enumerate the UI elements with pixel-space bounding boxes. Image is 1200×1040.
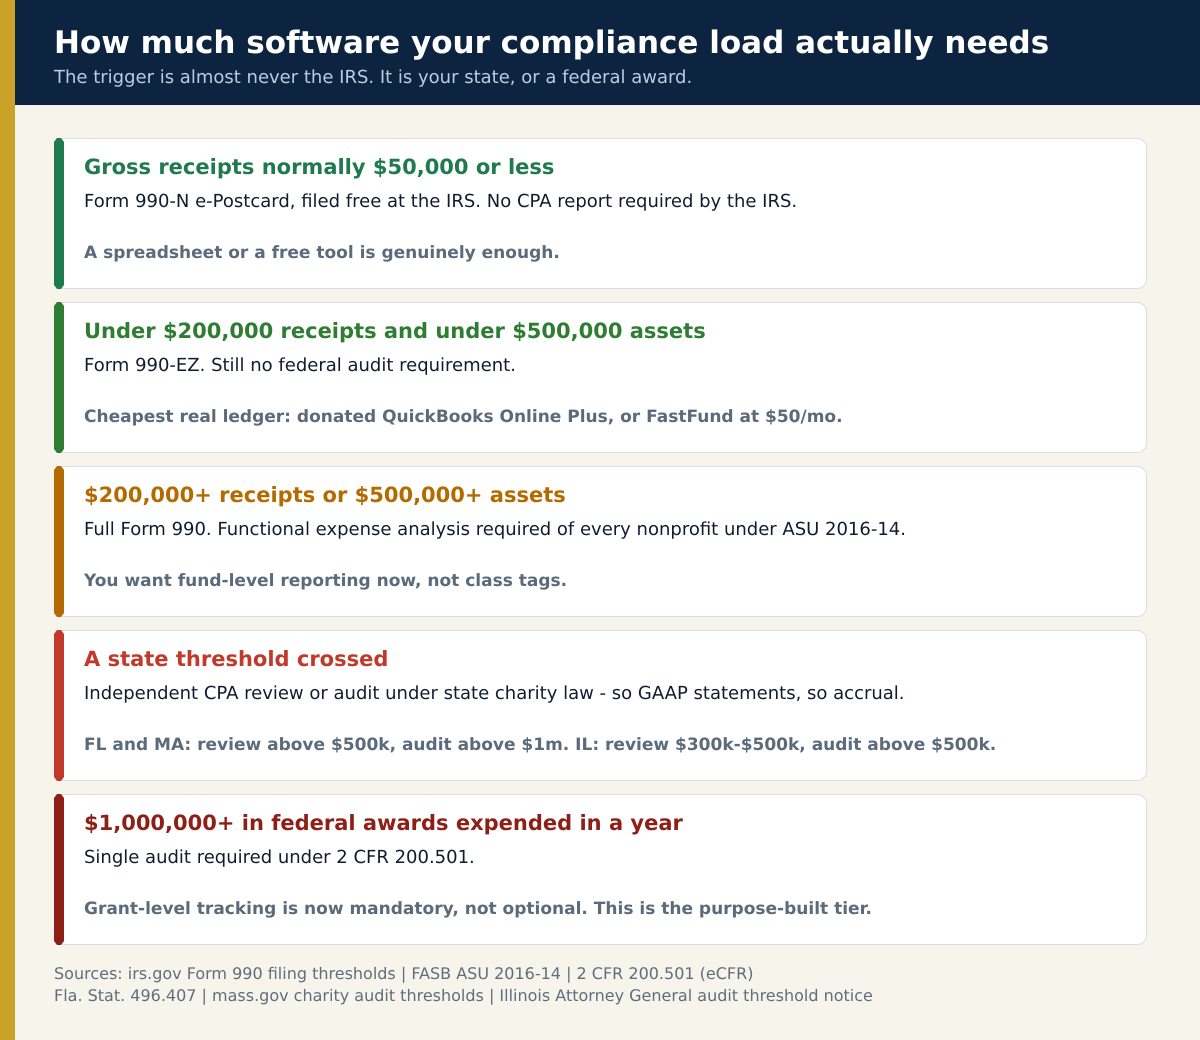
tier 1 description: Form 990-N e-Postcard, filed free at the IRS. No CPA report required by the IRS. (84, 191, 797, 212)
panel: tier 1 (54, 138, 1147, 289)
tier 2 recommendation: Cheapest real ledger: donated QuickBooks Online Plus, or FastFund at $50/mo. (84, 407, 843, 427)
tier 4 colour bar (54, 630, 64, 781)
tier 4 description: Independent CPA review or audit under state charity law - so GAAP statements, so accrual. (84, 683, 905, 704)
tier 1 heading: Gross receipts normally $50,000 or less (84, 155, 554, 179)
subtitle: The trigger is almost never the IRS. It is your state, or a federal award. (54, 67, 692, 88)
tier 1 colour bar (54, 138, 64, 289)
accent rail (0, 0, 15, 1040)
sources: Sources: irs.gov Form 990 filing thresholds | FASB ASU 2016-14 | 2 CFR 200.501 (eCFR) (54, 964, 753, 983)
tier 1 recommendation: A spreadsheet or a free tool is genuinely enough. (84, 243, 560, 263)
header band (15, 0, 1200, 105)
title: How much software your compliance load actually needs (54, 25, 1049, 61)
tier 5 heading: $1,000,000+ in federal awards expended in a year (84, 811, 683, 835)
sources (54, 964, 873, 1005)
tier 5 recommendation: Grant-level tracking is now mandatory, not optional. This is the purpose-built tier. (84, 899, 872, 919)
tier 4 heading: A state threshold crossed (84, 647, 388, 671)
tier 4 recommendation: FL and MA: review above $500k, audit above $1m. IL: review $300k-$500k, audit above $500k. (84, 735, 996, 755)
panel: tier 4 (54, 630, 1147, 781)
tier 3 recommendation: You want fund-level reporting now, not class tags. (84, 571, 567, 591)
panel: tier 2 (54, 302, 1147, 453)
tier 2 colour bar (54, 302, 64, 453)
tier 3 description: Full Form 990. Functional expense analysis required of every nonprofit under ASU 2016-14. (84, 519, 906, 540)
tier 2 description: Form 990-EZ. Still no federal audit requirement. (84, 355, 516, 376)
sources: Fla. Stat. 496.407 | mass.gov charity audit thresholds | Illinois Attorney General audit threshold notice (54, 986, 873, 1005)
tier 3 colour bar (54, 466, 64, 617)
tier 3 heading: $200,000+ receipts or $500,000+ assets (84, 483, 566, 507)
tier 5 description: Single audit required under 2 CFR 200.501. (84, 847, 475, 868)
panel: tier 5 (54, 794, 1147, 945)
tier 5 colour bar (54, 794, 64, 945)
panel: tier 3 (54, 466, 1147, 617)
tier 2 heading: Under $200,000 receipts and under $500,000 assets (84, 319, 706, 343)
